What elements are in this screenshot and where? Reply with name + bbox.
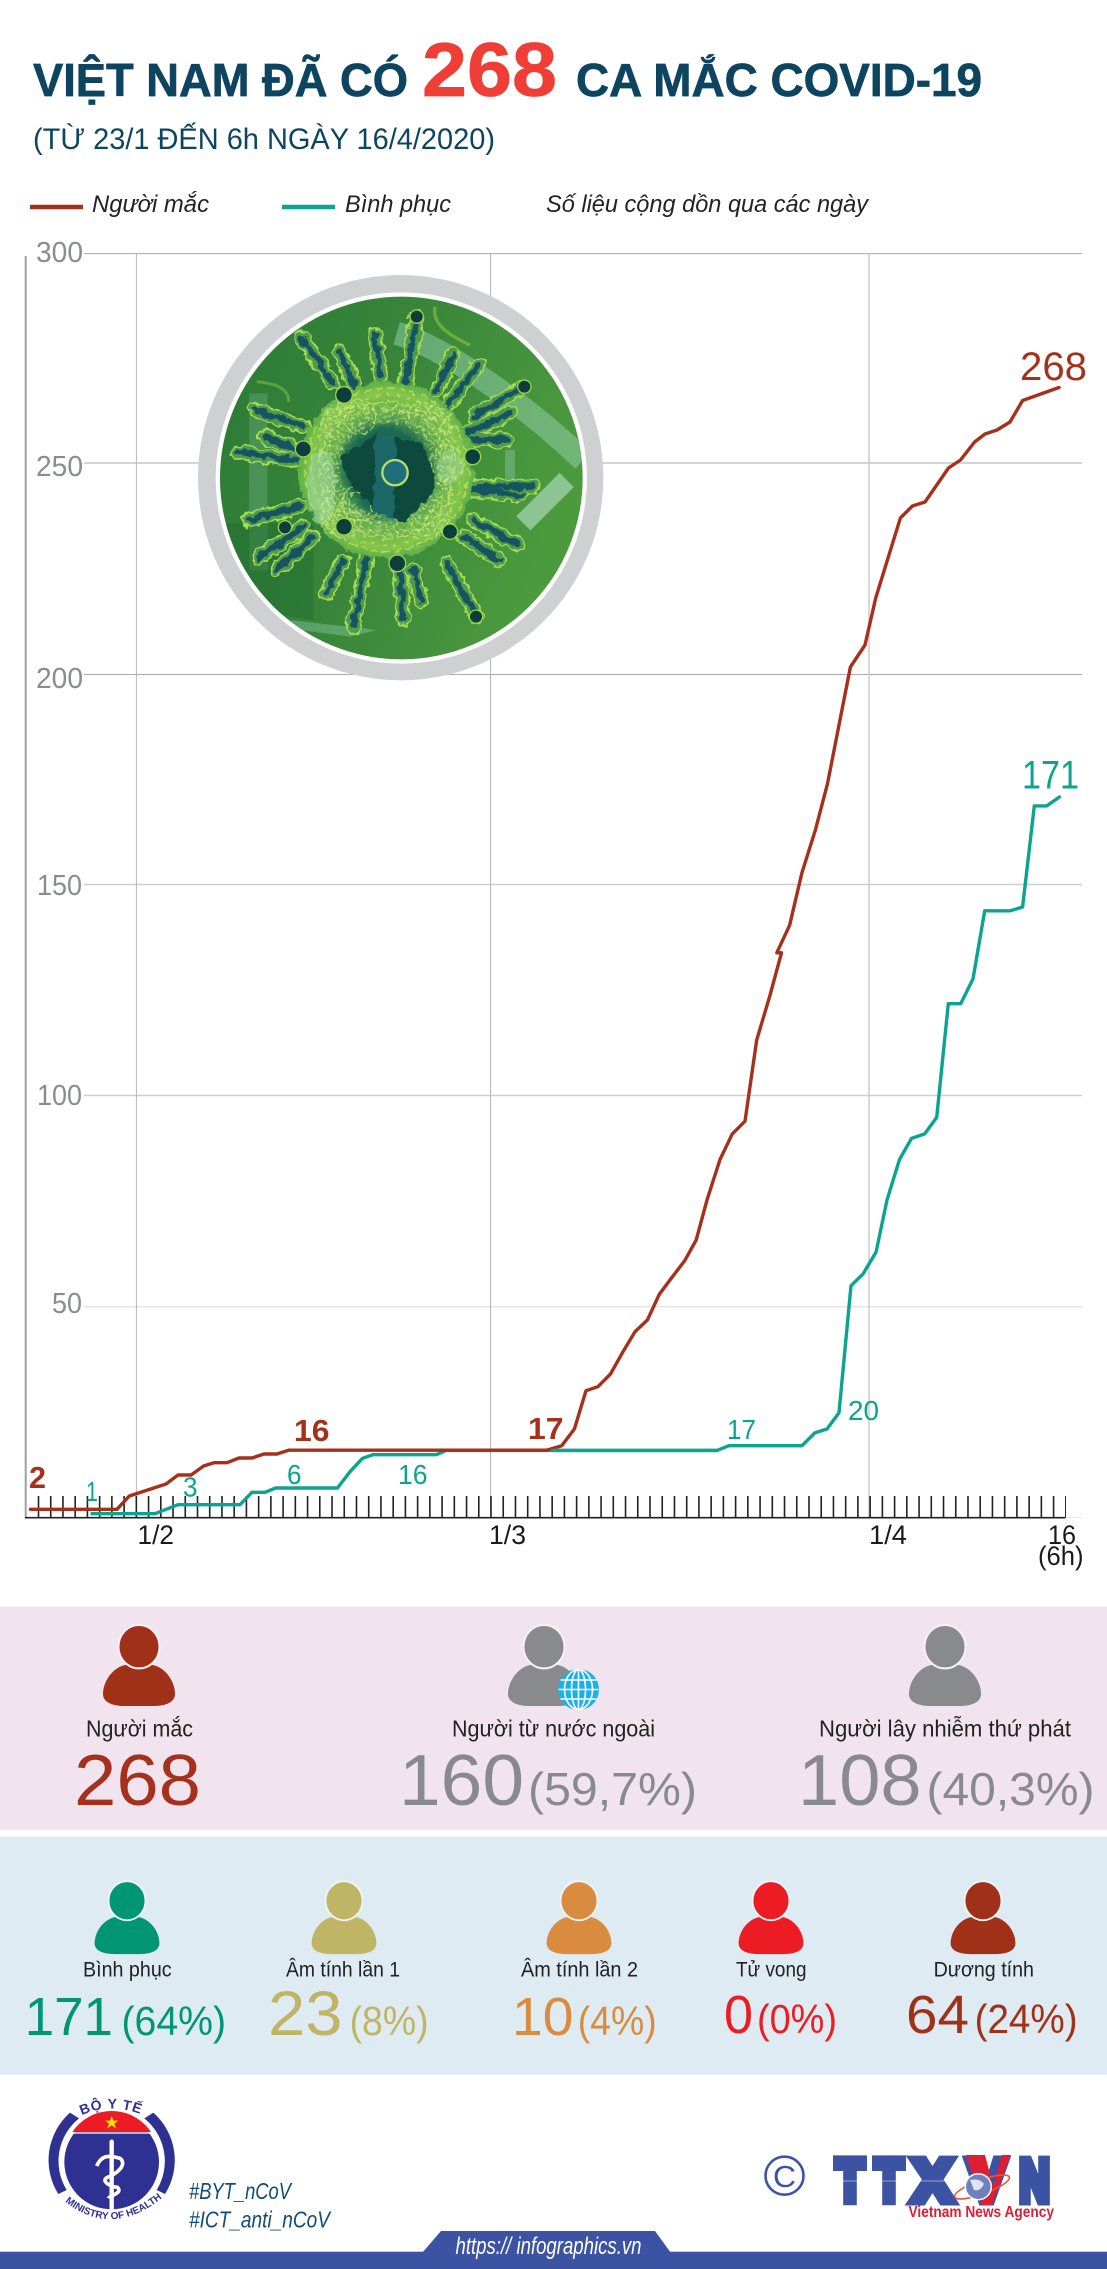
data labels teal: 1 xyxy=(86,1476,98,1507)
stat: 268: 268 xyxy=(74,1741,201,1821)
logo: ministry of health: BỘ Y TẾ xyxy=(79,2098,144,2115)
title: CA MẮC COVID-19 xyxy=(576,54,982,106)
x axis labels: 1/4 xyxy=(869,1520,907,1550)
agency name: Vietnam News Agency xyxy=(908,2204,1054,2221)
stat: 23: (8%) xyxy=(350,1998,429,2044)
y axis labels: 200 xyxy=(36,663,83,695)
legend: người mắc: Người mắc xyxy=(92,191,209,218)
y axis line xyxy=(25,256,27,1518)
logo: TTXVN xyxy=(831,2148,1054,2221)
data labels red: 17 xyxy=(528,1411,564,1446)
stat: 64: (24%) xyxy=(975,1996,1078,2042)
panel: total cases xyxy=(0,1607,1107,1830)
icon: copyright: C xyxy=(773,2159,796,2194)
y axis labels: 250 xyxy=(36,451,83,483)
logo: ministry of health: MINISTRY OF HEALTH xyxy=(66,2193,162,2220)
recovered line (teal) xyxy=(92,797,1059,1514)
cases line (red) xyxy=(30,388,1059,1509)
data labels teal: 20 xyxy=(848,1395,879,1426)
logo: ministry of health xyxy=(48,2098,175,2220)
stat: 10: 10 xyxy=(512,1987,574,2047)
stat: 108: 108 xyxy=(798,1741,922,1821)
stat: 108: (40,3%) xyxy=(926,1763,1094,1815)
outcome labels xyxy=(83,1959,1034,1982)
stat: 10 xyxy=(512,1987,657,2047)
stat: 160: 160 xyxy=(399,1741,524,1821)
data labels red: 268 xyxy=(1020,345,1087,389)
y axis labels: 300 xyxy=(36,237,83,269)
title: VIỆT NAM ĐÃ CÓ xyxy=(33,54,408,106)
title number 268: 268 xyxy=(422,28,557,113)
footer bar xyxy=(0,2231,1107,2269)
stat: 23: 23 xyxy=(268,1979,342,2049)
x axis line xyxy=(25,1517,1066,1519)
panel: outcomes xyxy=(0,1837,1107,2075)
virus body xyxy=(299,382,474,558)
panel labels: Người lây nhiễm thứ phát xyxy=(819,1716,1072,1742)
stat: 23 xyxy=(268,1979,429,2049)
legend xyxy=(30,191,870,218)
y axis labels: 150 xyxy=(37,870,82,902)
icon: person orange xyxy=(547,1881,611,1954)
logo: TTXVN: T xyxy=(875,2148,903,2214)
outcome labels: Tử vong xyxy=(736,1959,806,1982)
icon: copyright xyxy=(766,2157,804,2195)
panel labels: Người mắc xyxy=(86,1716,193,1742)
data labels teal: 6 xyxy=(287,1459,302,1490)
icon: person bright red xyxy=(739,1881,803,1954)
data labels teal: 171 xyxy=(1022,754,1079,798)
x axis labels: 16 xyxy=(1048,1520,1076,1550)
chart grid xyxy=(84,253,1082,1518)
lime spike outlines xyxy=(237,317,533,627)
stat: 0: (0%) xyxy=(757,1996,837,2042)
data labels red: 2 xyxy=(29,1460,46,1495)
data labels teal: 16 xyxy=(398,1459,428,1490)
icon: person khaki xyxy=(312,1881,376,1954)
x axis labels: 1/3 xyxy=(489,1520,526,1550)
stat: 171: 171 xyxy=(25,1987,113,2047)
teal overlay on shared segment xyxy=(551,1449,717,1452)
stat: 160 xyxy=(399,1741,697,1821)
y axis labels: 50 xyxy=(52,1288,82,1320)
stat: 0: 0 xyxy=(724,1985,753,2045)
logo: TTXVN: V xyxy=(968,2148,1006,2214)
website: https:// infographics.vn xyxy=(456,2233,642,2260)
hashtags: #BYT_nCoV xyxy=(189,2178,293,2204)
outcome labels: Bình phục xyxy=(83,1959,172,1982)
legend note: Số liệu cộng dồn qua các ngày xyxy=(546,191,870,218)
outcome labels: Âm tính lần 1 xyxy=(286,1959,400,1982)
x axis labels xyxy=(138,1520,1084,1571)
icon: person red xyxy=(103,1625,175,1706)
panel labels: Người từ nước ngoài xyxy=(452,1716,655,1742)
hashtags: #ICT_anti_nCoV xyxy=(189,2207,332,2233)
icon: person gray xyxy=(909,1625,981,1706)
stat: 171 xyxy=(25,1987,226,2047)
subtitle: (TỪ 23/1 ĐẾN 6h NGÀY 16/4/2020) xyxy=(33,122,495,156)
icon: person green xyxy=(95,1881,159,1954)
icon: person dark red xyxy=(951,1881,1015,1954)
hashtags xyxy=(189,2178,332,2233)
line chart xyxy=(25,237,1087,1571)
panel labels xyxy=(86,1716,1072,1742)
legend: bình phục: Bình phục xyxy=(345,191,451,218)
data labels teal xyxy=(86,754,1079,1507)
stat: 0 xyxy=(724,1985,837,2045)
stat: 64 xyxy=(906,1985,1078,2045)
stat: 171: (64%) xyxy=(122,1998,226,2044)
data labels red: 16 xyxy=(294,1413,330,1448)
logo: TTXVN: N xyxy=(1020,2148,1050,2214)
y axis labels xyxy=(36,237,83,1320)
stat: 160: (59,7%) xyxy=(528,1763,697,1815)
logo: TTXVN: X xyxy=(912,2148,952,2214)
data labels teal: 3 xyxy=(183,1472,198,1503)
stat: 64: 64 xyxy=(906,1985,969,2045)
outcome labels: Dương tính xyxy=(934,1959,1034,1982)
y axis labels: 100 xyxy=(37,1080,82,1112)
data labels red xyxy=(29,345,1087,1495)
x axis ticks xyxy=(38,1496,1066,1518)
stat: 10: (4%) xyxy=(578,1998,657,2044)
logo: TTXVN: T xyxy=(836,2148,864,2214)
data labels teal: 17 xyxy=(727,1414,756,1445)
icon: person gray with globe xyxy=(508,1625,599,1710)
x axis labels: 1/2 xyxy=(138,1520,174,1550)
outcome labels: Âm tính lần 2 xyxy=(521,1959,638,1982)
stat: 108 xyxy=(798,1741,1094,1821)
title xyxy=(33,28,982,113)
virus image xyxy=(198,275,603,680)
x axis labels: (6h) xyxy=(1038,1541,1084,1571)
